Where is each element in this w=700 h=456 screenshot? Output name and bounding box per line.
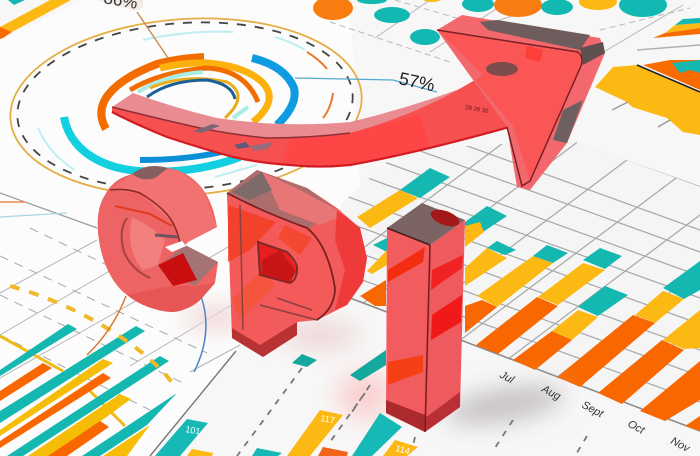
arrow head front face (437, 30, 582, 181)
chart: bottom value bars: 117 (320, 413, 336, 425)
shadows under letters (183, 306, 567, 432)
chart: right area graph (595, 60, 700, 135)
letter P (227, 170, 367, 357)
chart: lower-left diagonal bars (0, 286, 177, 456)
connector lines (0, 202, 587, 456)
month axis labels: Oct (626, 418, 647, 437)
month axis labels (497, 369, 693, 456)
arrow: rising red arrow (112, 15, 605, 190)
donut ring gauge (4, 7, 437, 207)
letter I (386, 203, 465, 432)
arrow head printed figures: 28 29 30 (465, 105, 489, 115)
label: 57 percent: 57% (397, 68, 437, 95)
month axis labels: Aug (539, 383, 563, 403)
month axis labels: Sept (580, 399, 606, 421)
arrow head side depth (437, 15, 605, 190)
chart: bottom value bars (155, 410, 418, 456)
panel: monthly stacked bar chart (340, 142, 700, 432)
month axis labels: Jul (497, 369, 516, 387)
arrow shaft top surface (112, 80, 475, 138)
letter C (98, 166, 218, 312)
arrow shaft front face (112, 75, 513, 166)
chart: bottom value bars: 101 (185, 424, 201, 437)
chart: top-right small stacked stripes (653, 18, 700, 38)
chart: upper-left bar fragments (0, 0, 71, 39)
month axis labels: Nov (669, 435, 693, 456)
top row of bubbles (313, 0, 667, 45)
